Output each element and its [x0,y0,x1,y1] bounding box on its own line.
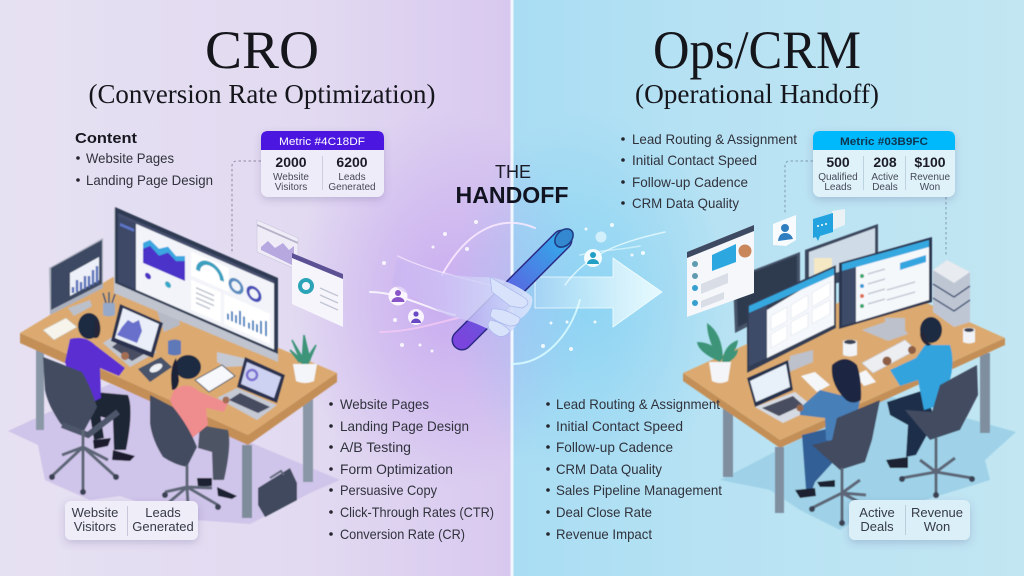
metric card: Ops/CRM [813,131,955,197]
pen cup [103,292,115,316]
front desk leg [242,445,252,518]
metric card: Ops/CRM: Deals [872,182,898,193]
text block: CRO tactics: Form Optimization [340,461,453,477]
icon card: contact [773,215,796,246]
text block: ops checklist: Initial Contact Speed [632,152,757,168]
main monitor [114,207,278,367]
text block: ops tactics: Initial Contact Speed [556,418,683,434]
note pad [43,318,77,340]
metric card: Ops/CRM: Active [871,172,899,183]
text block: ops checklist: Lead Routing & Assignment [632,131,797,147]
metric card: Ops/CRM: 500 [826,154,850,170]
front desk leg [775,447,784,513]
desk top [683,283,1005,440]
keyboard [862,340,916,373]
metric card: CRO: Leads [338,172,366,183]
illustration: Ops/CRM workstation [683,224,1016,530]
label card: ops metrics: Revenue [911,505,963,520]
floating panel: line chart [257,220,298,270]
label card: CRO metrics: Leads [145,505,181,520]
side monitor [49,238,103,316]
heading: the handoff: THE [495,162,531,182]
text block: ops tactics: CRM Data Quality [556,461,662,477]
mouse pad [138,357,172,382]
text block: ops checklist: Follow-up Cadence [632,174,748,190]
text block: CRO tactics: Click-Through Rates (CTR) [340,504,494,520]
text block: CRO tactics: A/B Testing [340,439,411,455]
back monitors [733,224,878,333]
papers [801,370,876,392]
label card: ops metrics: Active [859,505,895,520]
label card: CRO metrics: Generated [132,519,194,534]
text block: CRO tactics: Persuasive Copy [340,482,437,498]
text block: ops checklist: CRM Data Quality [632,195,739,211]
floor shadow [720,395,1016,530]
text block: ops tactics: Follow-up Cadence [556,439,673,455]
label card: ops metrics [849,500,970,540]
title: Ops/CRM: Ops/CRM [653,20,861,80]
text block: ops checklist [621,131,797,211]
metric card: Ops/CRM: $100 [914,154,946,170]
chair: man [43,357,119,495]
coffee mugs [843,328,975,356]
metric card: CRO: Visitors [275,182,307,193]
heading: the handoff: HANDOFF [456,182,568,208]
floor shadow [8,384,340,524]
man [882,317,952,468]
illustration: CRO workstation [8,207,340,524]
text block: CRO tactics [329,396,494,542]
desk legs back [723,353,990,477]
chair: woman [150,395,221,510]
floating panel: donut chart [292,253,343,327]
label card: CRO metrics [65,501,198,540]
laptop: woman [217,357,285,420]
text block: ops tactics: Lead Routing & Assignment [556,396,720,412]
title: Ops/CRM: (Operational Handoff) [635,79,879,109]
metric card: CRO [261,131,384,197]
chair: woman [809,400,880,526]
front monitor [747,265,836,373]
man [65,313,135,461]
metric card: CRO: Generated [328,182,376,193]
briefcase [258,468,297,517]
monitor stands [770,318,908,375]
clipboard [195,365,235,392]
desk top [20,277,337,435]
text block: CRO tactics: Conversion Rate (CR) [340,526,465,542]
text block: CRO tactics: Landing Page Design [340,418,469,434]
server stack [933,260,970,327]
title: CRO [88,20,436,109]
plant [290,335,317,383]
connector: CRO metric to monitor [232,161,261,254]
laptop: man [103,304,163,367]
icon: chat bubble and note [813,209,845,241]
text block: content list: Content [75,130,137,147]
metric card: Ops/CRM: Metric #03B9FC [840,136,928,148]
title: CRO: (Conversion Rate Optimization) [88,79,436,109]
illustration: handoff streams and sparkles [370,220,665,364]
text block: content list: Website Pages [86,150,174,166]
text block: CRO tactics: Website Pages [340,396,429,412]
right monitor [839,237,932,329]
connectors: ops metric to monitors [785,161,946,255]
text block: ops tactics: Revenue Impact [556,526,652,542]
metric card: CRO: 6200 [336,154,368,170]
illustration: baton and hand [392,225,577,340]
desk legs back [36,345,313,482]
icons: lead avatars [388,232,606,325]
title: Ops/CRM [635,20,879,109]
laptop [747,360,815,423]
text block: ops tactics [546,396,722,542]
text block: ops tactics: Sales Pipeline Management [556,482,722,498]
chair: man [899,365,978,498]
title: CRO: CRO [205,20,319,80]
text block: ops tactics: Deal Close Rate [556,504,652,520]
arrow: handoff to ops [535,258,662,327]
coffee mug [168,340,181,356]
woman [795,359,861,498]
metric card: Ops/CRM: Revenue [910,172,950,183]
label card: CRO metrics: Visitors [74,519,117,534]
metric card: Ops/CRM: Leads [824,182,852,193]
metric card: CRO: Website [273,172,309,183]
text block: content list [75,130,213,188]
plant [697,323,738,383]
label card: ops metrics: Won [924,519,950,534]
metric card: Ops/CRM: 208 [873,154,897,170]
metric card: Ops/CRM: Qualified [818,172,858,183]
woman [170,355,237,499]
metric card: CRO: Metric #4C18DF [279,136,365,148]
text block: content list: Landing Page Design [86,172,213,188]
label card: CRO metrics: Website [72,505,118,520]
metric card: Ops/CRM: Won [920,182,940,193]
metric card: CRO: 2000 [275,154,307,170]
label card: ops metrics: Deals [860,519,894,534]
heading: the handoff [456,162,568,208]
floating panel: lead list [687,225,754,317]
